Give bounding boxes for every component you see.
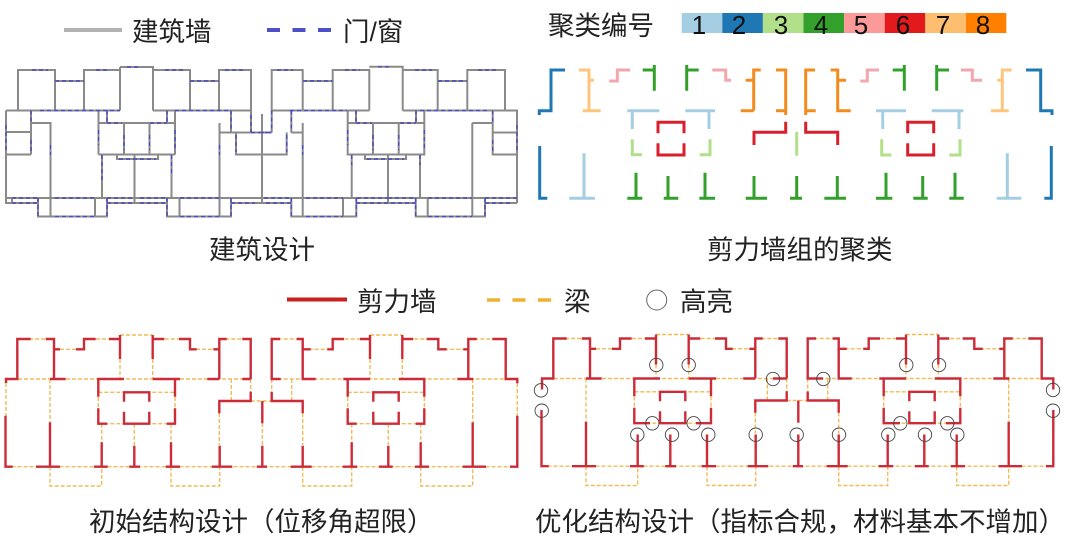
cluster 3 walls [632,132,960,156]
shear walls [542,334,1053,466]
doors and windows [6,67,517,216]
caption: initial structural design: 初始结构设计（位移角超限） [89,507,434,537]
color bar with numbers: 6 [896,10,910,40]
color bar with numbers: 7 [936,10,950,40]
legend item: beam [487,287,590,317]
cluster 5 walls [609,70,982,81]
cluster 7 walls [579,70,1012,111]
cluster 2 walls [539,70,1052,198]
color bar with numbers: 8 [976,10,990,40]
legend item: highlight: 高亮 [680,287,733,317]
beams [6,335,517,486]
caption: shear wall group clustering: 剪力墙组的聚类 [707,235,892,265]
color bar with numbers: 5 [854,10,868,40]
color bar with numbers: 1 [692,10,706,40]
caption: optimized structural design: 优化结构设计（指标合规，材料基本不增加） [535,507,1065,537]
legend: cluster numbers [548,10,1006,41]
legend item: door and window: 门/窗 [343,17,403,47]
cluster 4 walls [627,65,964,198]
shear walls [6,335,517,467]
legend: building walls and doors [64,17,403,47]
beams [542,334,1053,486]
cluster 6 walls [658,122,934,155]
architectural walls [6,67,517,216]
highlight circles [534,358,1060,441]
legend item: beam: 梁 [564,287,590,317]
color bar with numbers [682,10,1006,40]
panel: initial structural design [6,335,517,486]
caption: architectural design: 建筑设计 [209,235,315,265]
legend item: building wall: 建筑墙 [132,17,212,47]
cluster 8 walls [741,70,851,115]
panel: architectural plan [6,67,517,216]
legend item: door and window [267,17,403,47]
panel: optimized structural design [534,334,1060,486]
color bar with numbers: 2 [732,10,746,40]
cluster 1 walls [569,111,1021,198]
color bar with numbers: 4 [814,10,828,40]
legend: structure [287,287,733,317]
color bar with numbers: 3 [774,10,788,40]
legend title: 聚类编号 [548,11,654,41]
legend item: highlight [647,287,733,317]
legend item: shear wall: 剪力墙 [357,287,436,317]
panel: shear wall clusters [539,65,1052,198]
